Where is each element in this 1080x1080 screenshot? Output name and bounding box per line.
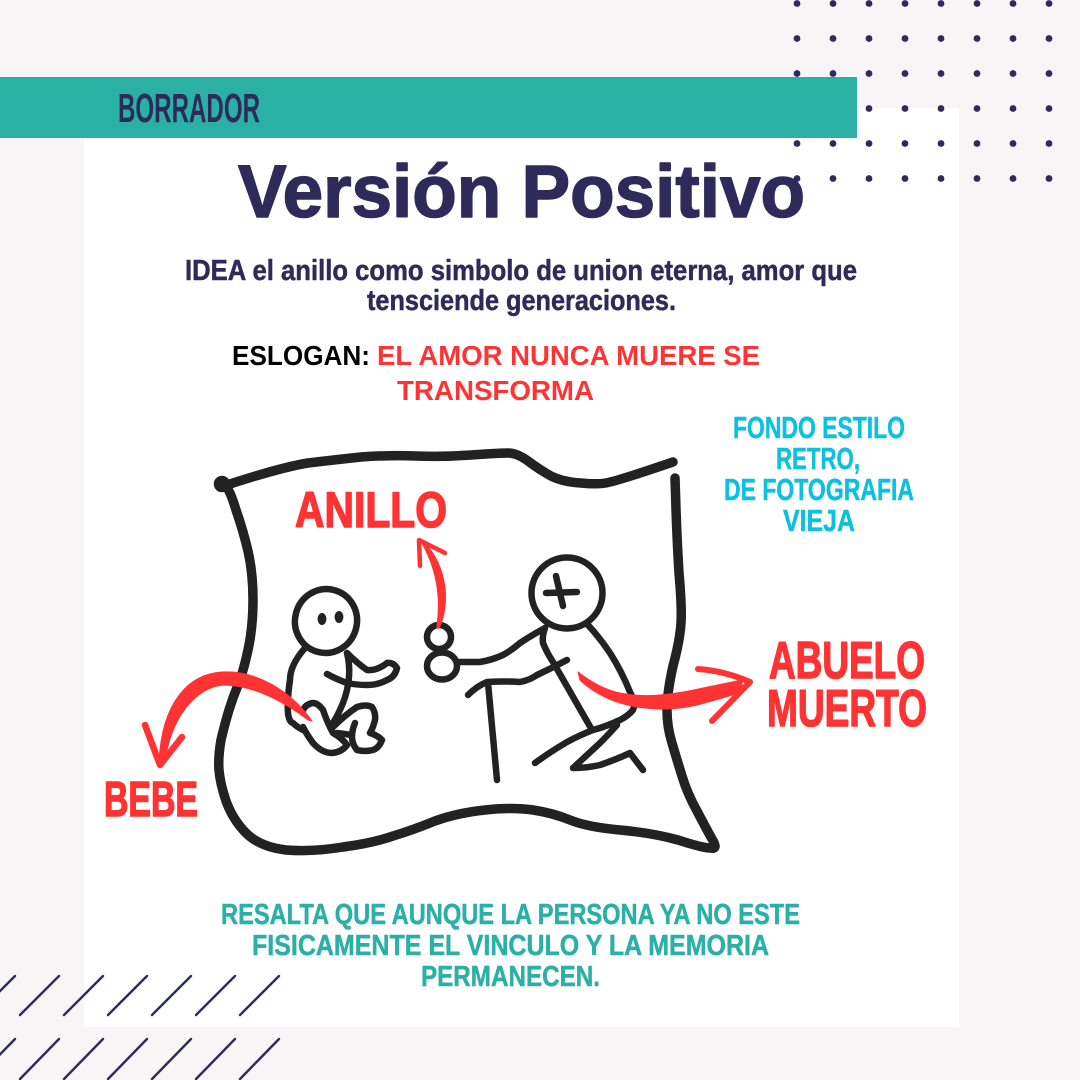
- label: abuelo muerto: MUERTO: [767, 680, 927, 738]
- label: abuelo muerto: [767, 632, 927, 738]
- sketch: baby: [288, 582, 397, 753]
- label: bebe: BEBE: [104, 773, 198, 827]
- label: abuelo muerto: ABUELO: [769, 632, 925, 690]
- idea text: [185, 255, 857, 317]
- idea text: tensciende generaciones.: [367, 285, 676, 317]
- slogan: ESLOGAN:: [232, 340, 370, 371]
- title: Versión Positivo: [238, 150, 805, 233]
- note: fondo estilo retro: DE FOTOGRAFIA: [724, 472, 914, 507]
- note: fondo estilo retro: [724, 410, 914, 538]
- closing text: FISICAMENTE EL VINCULO Y LA MEMORIA: [252, 930, 769, 962]
- dot pattern: [794, 0, 1052, 182]
- slogan: EL AMOR NUNCA MUERE SE: [377, 340, 760, 371]
- banner: borrador: BORRADOR: [118, 85, 260, 131]
- note: fondo estilo retro: VIEJA: [783, 503, 855, 538]
- banner: borrador: [0, 77, 857, 138]
- icon: ring: [427, 625, 457, 680]
- sketch: grandfather: [458, 558, 643, 780]
- note: fondo estilo retro: RETRO,: [776, 441, 860, 476]
- panel: white page: [84, 108, 959, 1027]
- closing text: PERMANECEN.: [421, 961, 600, 993]
- closing text: RESALTA QUE AUNQUE LA PERSONA YA NO ESTE: [221, 899, 800, 931]
- slogan: [232, 340, 760, 406]
- idea text: IDEA el anillo como simbolo de union eterna, amor que: [185, 255, 857, 287]
- arrow: to grandfather: [578, 669, 750, 721]
- closing text: [221, 899, 800, 993]
- arrow: to anillo: [419, 540, 445, 628]
- arrow: to baby: [145, 672, 312, 765]
- diagonal line pattern: [0, 976, 279, 1079]
- slogan: TRANSFORMA: [397, 375, 594, 406]
- note: fondo estilo retro: FONDO ESTILO: [733, 410, 905, 445]
- label: anillo: ANILLO: [295, 482, 447, 538]
- sketch: photo frame: [218, 453, 715, 851]
